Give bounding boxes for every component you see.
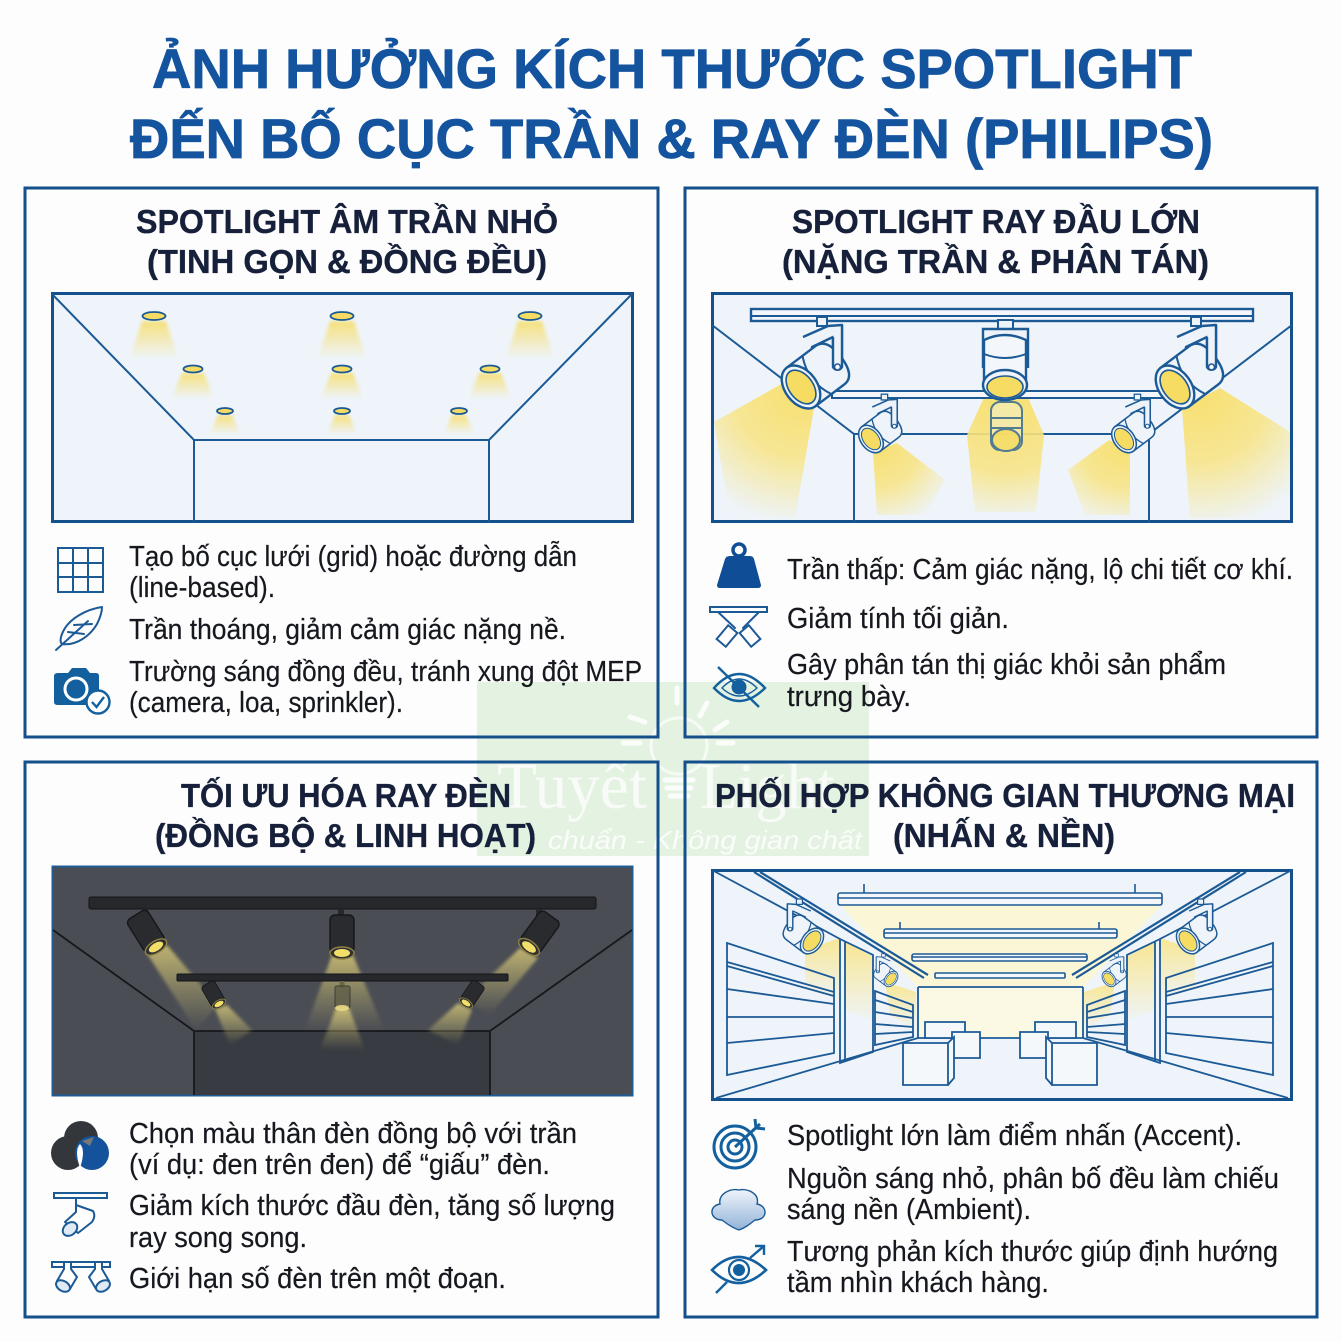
- text: accent: Spotlight lớn làm điểm nhấn (Accent).: [787, 1120, 1242, 1152]
- text: grid layout: Tạo bố cục lưới (grid) hoặc đường dẫn: [129, 540, 577, 573]
- text: even light field: Trường sáng đồng đều, tránh xung đột MEP: [129, 656, 642, 688]
- text: limit per segment: Giới hạn số đèn trên một đoạn.: [129, 1263, 506, 1295]
- text: low ceiling: Trần thấp: Cảm giác nặng, lộ chi tiết cơ khí.: [787, 554, 1293, 586]
- text: ambient: Nguồn sáng nhỏ, phân bố đều làm chiếu: [787, 1163, 1279, 1195]
- text: smaller heads: [129, 1190, 615, 1254]
- lamp: large right: [1148, 317, 1229, 416]
- icon: double track lamps: [52, 1262, 112, 1294]
- lamp: small right: [1107, 394, 1159, 457]
- icon: ambient cloud: [712, 1190, 765, 1230]
- illustration: large track spotlights: [712, 294, 1292, 522]
- text: size contrast: Tương phản kích thước giúp định hướng: [787, 1236, 1278, 1268]
- icon: crossed-out eye: [714, 667, 765, 707]
- icon: target: [714, 1119, 765, 1168]
- text: grid layout: [129, 540, 577, 604]
- heading: phối hợp không gian: PHỐI HỢP KHÔNG GIAN THƯƠNG MẠI: [715, 776, 1295, 814]
- illustration: retail space: [712, 870, 1292, 1100]
- lamp: small right: [458, 979, 485, 1010]
- text: grid layout: (line-based).: [129, 572, 275, 604]
- text: airy ceiling: Trần thoáng, giảm cảm giác nặng nề.: [129, 614, 566, 646]
- lamp: large center: [983, 320, 1028, 400]
- text: visual distraction: Gây phân tán thị giác khỏi sản phẩm: [787, 649, 1226, 681]
- text: ambient: sáng nền (Ambient).: [787, 1194, 1031, 1226]
- lamp: large left: [126, 908, 169, 958]
- heading: spotlight âm trần nhỏ: SPOTLIGHT ÂM TRẦN NHỎ: [136, 203, 558, 240]
- accent lamp: right small: [1099, 954, 1129, 989]
- heading: phối hợp không gian: [715, 776, 1295, 854]
- watermark: Tuyết Light: Light: [700, 750, 835, 823]
- lamp: small left: [201, 980, 227, 1011]
- title: ẢNH HƯỞNG KÍCH THƯỚC SPOTLIGHT: [152, 37, 1192, 100]
- text: ambient: [787, 1163, 1279, 1226]
- lamp: large center: [330, 915, 354, 959]
- panel: tối ưu hóa ray đèn: [25, 762, 658, 1317]
- text: match body color: [129, 1118, 577, 1181]
- heading: spotlight ray đầu lớn: (NẶNG TRẦN & PHÂN TÁN): [782, 243, 1209, 280]
- panel: spotlight âm trần nhỏ: [25, 188, 658, 737]
- text: reduced minimalism: Giảm tính tối giản.: [787, 603, 1009, 635]
- accent lamp: left large: [779, 899, 828, 958]
- watermark: Tuyết Light: [477, 682, 869, 856]
- lamp: small left: [854, 394, 906, 457]
- panel: spotlight ray đầu lớn: [685, 188, 1317, 737]
- accent lamp: right large: [1172, 899, 1221, 958]
- title: [130, 37, 1213, 170]
- lamp: large right: [516, 909, 561, 959]
- icon: color overlap circles: [51, 1121, 109, 1170]
- watermark: Tuyết Light: chuẩn - Không gian chất: [548, 825, 864, 855]
- icon: single track lamp: [54, 1193, 107, 1239]
- heading: tối ưu hóa ray đèn: [155, 776, 536, 854]
- panel: phối hợp không gian thương mại: [685, 762, 1317, 1317]
- icon: weight: [717, 544, 761, 588]
- text: match body color: Chọn màu thân đèn đồng bộ với trần: [129, 1118, 577, 1150]
- icon: feather: [56, 607, 102, 650]
- text: even light field: (camera, loa, sprinkler).: [129, 687, 403, 719]
- icon: eye with arrow: [712, 1246, 766, 1293]
- icon: crossed track lamps: [710, 607, 767, 647]
- accent lamp: left small: [871, 954, 901, 989]
- text: smaller heads: Giảm kích thước đầu đèn, tăng số lượng: [129, 1190, 615, 1222]
- heading: spotlight âm trần nhỏ: [136, 203, 558, 280]
- watermark: Tuyết Light: Tuyết: [497, 750, 647, 823]
- heading: spotlight âm trần nhỏ: (TINH GỌN & ĐỒNG ĐỀU): [147, 243, 547, 280]
- icon: grid: [58, 548, 103, 592]
- text: visual distraction: [787, 649, 1226, 713]
- heading: spotlight ray đầu lớn: SPOTLIGHT RAY ĐẦU LỚN: [792, 203, 1200, 240]
- text: even light field: [129, 656, 642, 719]
- illustration: recessed downlights on ceiling: [52, 294, 632, 522]
- text: smaller heads: ray song song.: [129, 1222, 307, 1254]
- text: visual distraction: trưng bày.: [787, 681, 911, 713]
- text: match body color: (ví dụ: đen trên đen) để “giấu” đèn.: [129, 1149, 550, 1181]
- display cubes: [903, 1022, 1097, 1085]
- title: ĐẾN BỐ CỤC TRẦN & RAY ĐÈN (PHILIPS): [130, 107, 1213, 170]
- heading: spotlight ray đầu lớn: [782, 203, 1209, 280]
- heading: phối hợp không gian: (NHẤN & NỀN): [893, 817, 1115, 854]
- text: size contrast: tầm nhìn khách hàng.: [787, 1267, 1049, 1299]
- heading: tối ưu hóa ray đèn: TỐI ƯU HÓA RAY ĐÈN: [181, 776, 511, 814]
- lamp: large left: [774, 317, 855, 416]
- text: size contrast: [787, 1236, 1278, 1299]
- lamp: small center: [335, 986, 350, 1011]
- icon: camera with check: [54, 668, 110, 714]
- linear ceiling lights: [838, 884, 1162, 978]
- lamp: ghost center: [991, 402, 1022, 451]
- heading: tối ưu hóa ray đèn: (ĐỒNG BỘ & LINH HOẠT): [155, 816, 536, 854]
- illustration: black track on dark ceiling: [52, 866, 632, 1096]
